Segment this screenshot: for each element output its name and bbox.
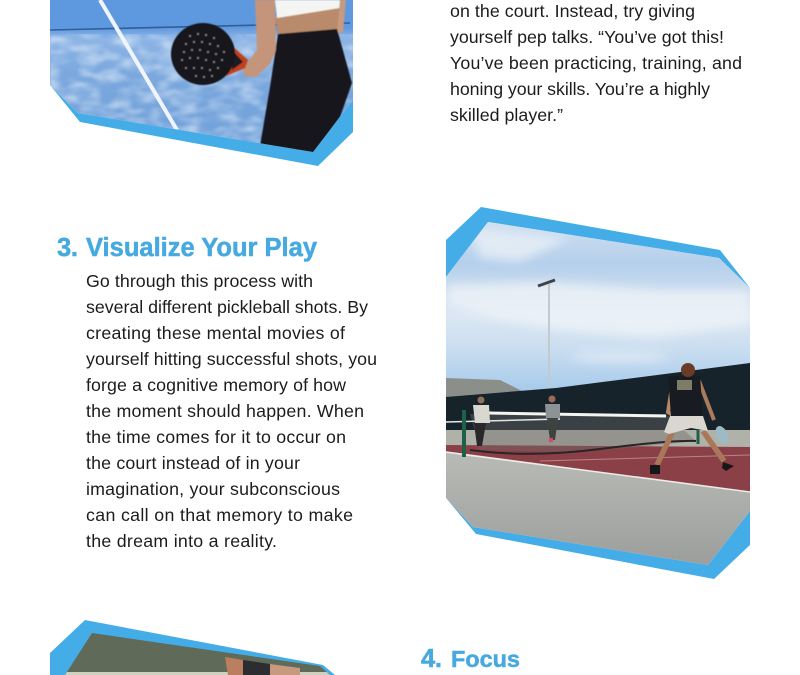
net: [446, 410, 698, 457]
far left player: [473, 396, 490, 446]
photo: pickleball doubles game on court: [446, 207, 750, 579]
paddle: [171, 23, 248, 85]
heading: 4. Focus: 4.: [421, 645, 442, 673]
text block: visualize your play: [86, 271, 377, 551]
building: [446, 378, 522, 397]
far middle player: [545, 396, 560, 442]
text block: visualize your play: several different pickleball shots. By: [86, 297, 368, 317]
text block: visualize your play: imagination, your subconscious: [86, 479, 340, 499]
text block: visualize your play: the court instead of in your: [86, 453, 300, 473]
light pole: [538, 280, 555, 392]
near player: [650, 363, 734, 474]
photo: partial player close-up: [50, 620, 340, 675]
ground and court: [446, 430, 750, 447]
photo: padel player with paddle: [50, 0, 354, 166]
right text block: pep talks: yourself pep talks. “You’ve got this!: [450, 27, 724, 47]
clouds: [446, 228, 750, 362]
text block: visualize your play: yourself hitting successful shots, you: [86, 349, 377, 369]
right text block: pep talks: skilled player.”: [450, 105, 563, 125]
heading: 3. Visualize Your Play: Visualize Your Play: [86, 234, 318, 262]
right text block: pep talks: [450, 1, 742, 125]
right text block: pep talks: honing your skills. You’re a highly: [450, 79, 710, 99]
player torso and leggings: [243, 0, 352, 155]
text block: visualize your play: the dream into a reality.: [86, 531, 277, 551]
text block: visualize your play: Go through this process with: [86, 271, 313, 291]
fence: [446, 363, 750, 432]
text block: visualize your play: can call on that memory to make: [86, 505, 353, 525]
text block: visualize your play: creating these mental movies of: [86, 323, 345, 343]
heading: 4. Focus: [421, 645, 520, 673]
text block: visualize your play: the moment should happen. When: [86, 401, 364, 421]
text block: visualize your play: the time comes for it to occur on: [86, 427, 346, 447]
text block: visualize your play: forge a cognitive memory of how: [86, 375, 346, 395]
heading: 4. Focus: Focus: [451, 646, 520, 672]
right text block: pep talks: on the court. Instead, try giving: [450, 1, 695, 21]
heading: 3. Visualize Your Play: 3.: [57, 234, 78, 262]
right text block: pep talks: You’ve been practicing, training, and: [450, 53, 742, 73]
